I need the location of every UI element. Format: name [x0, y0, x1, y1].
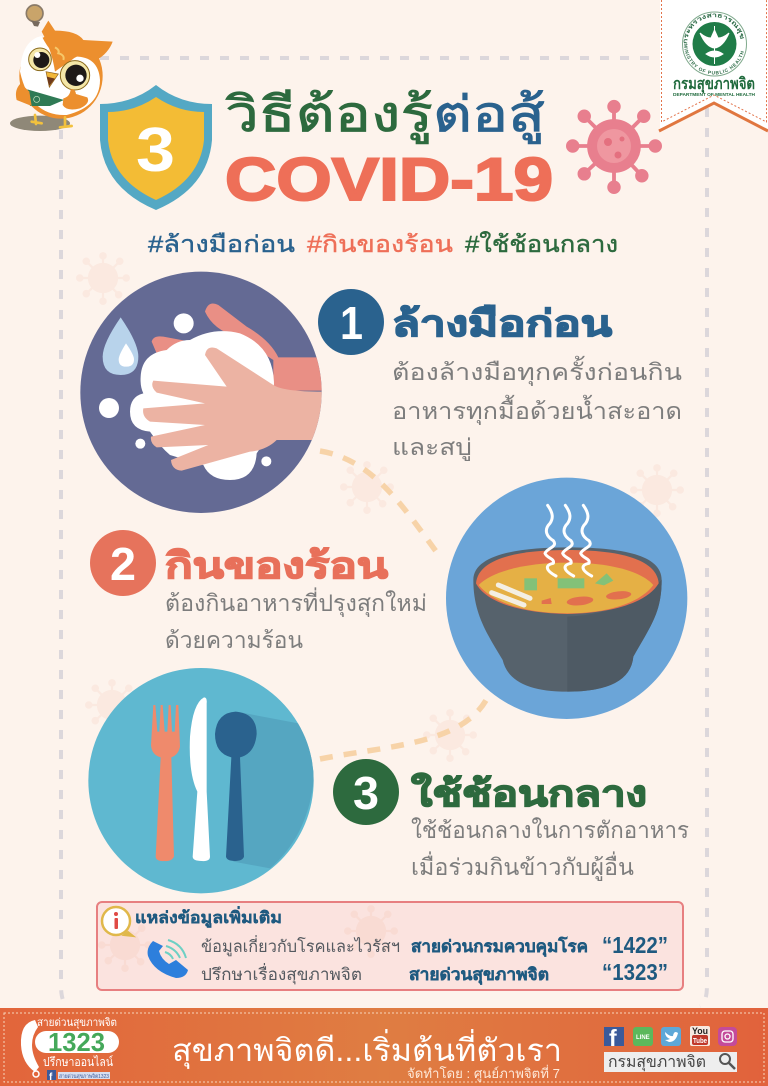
hotline 1323: f	[49, 1072, 53, 1083]
hotline 1323: สายด่วนสุขภาพจิต1323	[59, 1073, 109, 1080]
illustration: fork knife spoon	[88, 668, 314, 893]
step 2: eat hot food: กินของร้อน	[165, 545, 388, 586]
shield badge with number 3	[100, 85, 212, 210]
hotline 1323: 1323	[48, 1027, 105, 1057]
soap bubbles	[99, 313, 271, 466]
panel: more information: แหล่งข้อมูลเพิ่มเติม	[135, 906, 282, 929]
hotline 1323	[21, 1017, 119, 1083]
hotline 1323: ปรึกษาออนไลน์	[43, 1055, 113, 1069]
icon: info	[102, 907, 133, 936]
social icons: f	[609, 1025, 617, 1051]
panel: more information: “1323”	[602, 959, 668, 985]
dashed connector lines	[320, 451, 491, 759]
step 3: serving spoon: ใช้ช้อนกลาง	[411, 772, 647, 814]
footer band	[0, 1008, 768, 1086]
step 3: serving spoon: ใช้ช้อนกลางในการตักอาหาร	[411, 817, 689, 843]
social icons: You	[692, 1026, 708, 1036]
illustration: washing hands	[80, 272, 323, 513]
title: COVID-19	[225, 146, 553, 213]
credit: จัดทำโดย : ศูนย์ภาพจิตที่ 7	[407, 1065, 560, 1082]
title	[225, 88, 553, 213]
step 1: wash hands	[318, 289, 682, 461]
hotline 1323: สายด่วนสุขภาพจิต	[37, 1017, 117, 1029]
ribbon logo: department of mental health: DEPARTMENT OF MENTAL HEALTH	[673, 92, 755, 97]
slogan: สุขภาพจิตดี...เริ่มต้นที่ตัวเรา	[172, 1029, 562, 1070]
fork	[151, 705, 180, 861]
social icons: LINE	[636, 1035, 650, 1041]
ribbon logo: department of mental health	[658, 0, 768, 132]
panel: more information: “1422”	[602, 932, 668, 958]
step 1: wash hands: อาหารทุกมื้อด้วยน้ำสะอาด	[392, 395, 682, 425]
spoon	[215, 712, 257, 861]
title: วิธีต้องรู้ ต่อสู้	[225, 88, 545, 144]
step 2: eat hot food: 2	[110, 538, 136, 590]
panel: more information: ข้อมูลเกี่ยวกับโรคและไวรัสฯ	[201, 935, 400, 957]
social icons	[604, 1025, 737, 1051]
step 3: serving spoon: 3	[353, 767, 379, 819]
step 1: wash hands: ต้องล้างมือทุกครั้งก่อนกิน	[392, 356, 682, 386]
faded virus pattern	[77, 253, 683, 761]
illustration: hot soup bowl	[446, 478, 687, 719]
shield badge with number 3: 3	[136, 116, 175, 185]
icon: phone	[148, 940, 188, 978]
knife	[190, 697, 210, 861]
step 3: serving spoon: เมื่อร่วมกินข้าวกับผู้อื่น	[411, 851, 634, 881]
icon: water drop	[103, 317, 138, 375]
panel: more information: ปรึกษาเรื่องสุขภาพจิต	[201, 963, 362, 985]
panel: more information: สายด่วนกรมควบคุมโรค	[411, 936, 588, 957]
icon: virus	[568, 102, 660, 192]
search box: กรมสุขภาพจิต	[608, 1054, 706, 1072]
hashtags: #กินของร้อน	[307, 231, 453, 257]
step 1: wash hands: และสบู่	[392, 434, 472, 461]
hashtags: #ใช้ช้อนกลาง	[465, 231, 618, 257]
step 2: eat hot food: ด้วยความร้อน	[165, 627, 303, 653]
hashtags	[148, 231, 618, 257]
step 2: eat hot food	[90, 530, 427, 653]
step 3: serving spoon	[333, 759, 689, 881]
steam	[545, 505, 592, 576]
owl mascot	[10, 5, 113, 131]
dashed page frame	[61, 58, 707, 1006]
ribbon logo: department of mental health: MINISTRY OF PUBLIC HEALTH	[684, 44, 744, 74]
social icons: Tube	[693, 1038, 707, 1045]
step 1: wash hands: ล้างมือก่อน	[392, 303, 612, 344]
step 2: eat hot food: ต้องกินอาหารที่ปรุงสุกใหม่	[165, 587, 427, 617]
ribbon logo: department of mental health: กระทรวงสาธารณสุข	[684, 13, 744, 44]
search box	[604, 1052, 737, 1072]
panel: more information: สายด่วนสุขภาพจิต	[409, 965, 549, 985]
step 1: wash hands: 1	[340, 297, 363, 349]
panel: more information	[97, 902, 683, 990]
hashtags: #ล้างมือก่อน	[148, 231, 295, 257]
